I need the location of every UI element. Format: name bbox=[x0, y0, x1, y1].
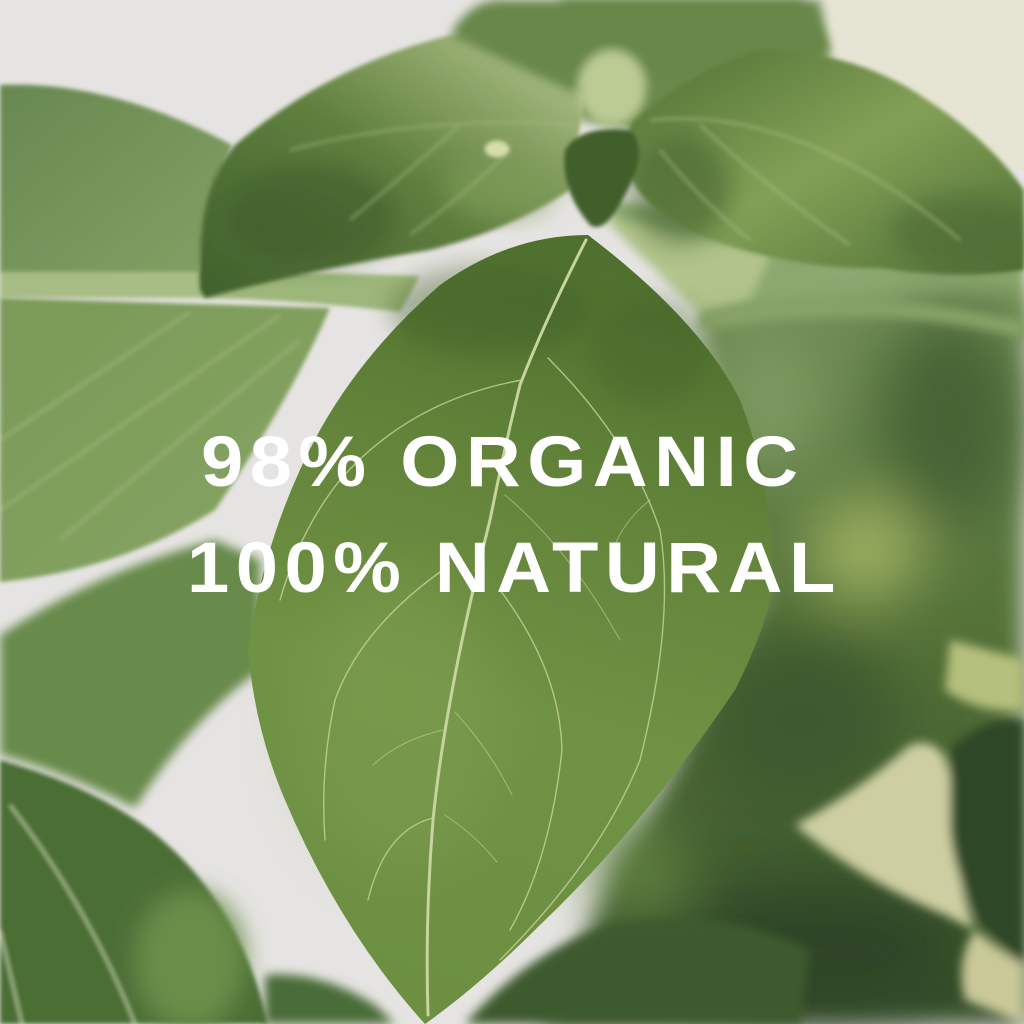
bud at leaf junction bbox=[564, 129, 639, 227]
stem bbox=[200, 272, 420, 312]
leaf: upper right bbox=[625, 50, 1024, 275]
leaf: far left upper bbox=[0, 85, 232, 298]
midrib and veins bbox=[280, 240, 664, 1015]
line 2: 100% NATURAL bbox=[187, 527, 835, 607]
blurred background foliage, right side bbox=[540, 0, 1024, 1024]
leaf: bottom left bbox=[0, 760, 268, 1024]
leaf: top centre bbox=[450, 0, 830, 126]
leaf: upper left bbox=[199, 35, 585, 298]
leaf: left lower bbox=[0, 540, 260, 808]
main basil leaf bbox=[248, 235, 772, 1024]
headline text bbox=[187, 421, 835, 607]
leaf: far left middle bbox=[0, 298, 330, 582]
line 1: 98% ORGANIC bbox=[201, 421, 798, 501]
leaf: bottom centre bbox=[265, 919, 810, 1024]
